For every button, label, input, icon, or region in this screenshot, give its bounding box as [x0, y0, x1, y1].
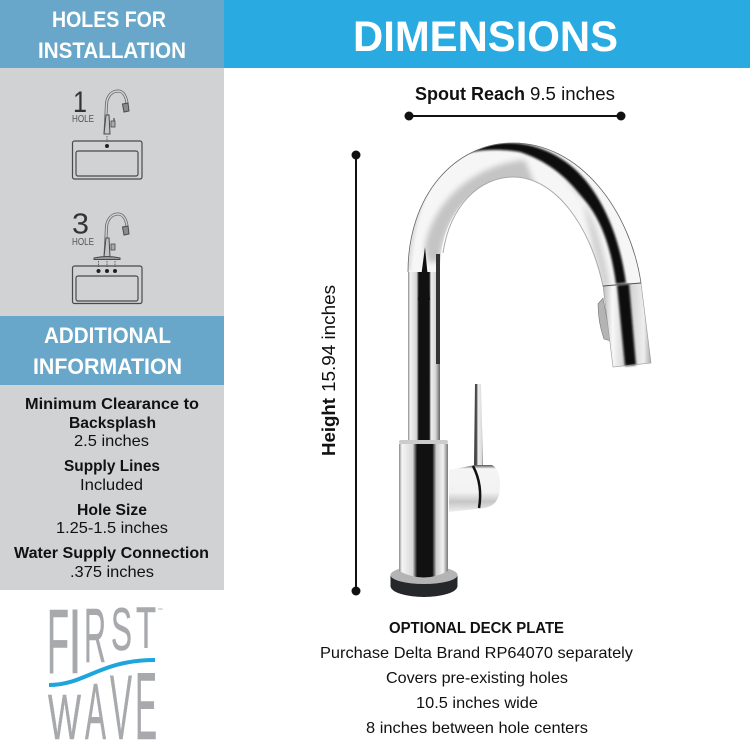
height dimension: 15.94 inches — [319, 285, 339, 392]
height dimension — [319, 150, 360, 596]
heading band: holes for installation: INSTALLATION — [38, 38, 186, 63]
logo: First Wave: T — [136, 596, 156, 661]
heading band: holes for installation — [0, 0, 224, 68]
panel: holes for installation — [0, 0, 224, 316]
icon: one hole installation: HOLE — [72, 114, 94, 125]
text: minimum clearance: 2.5 inches — [74, 433, 149, 450]
spout arc — [406, 140, 641, 364]
deck plate text: 10.5 inches wide — [416, 695, 538, 712]
icon: one hole installation: 1 — [73, 86, 87, 119]
heading band: dimensions: DIMENSIONS — [353, 13, 618, 61]
spout reach dimension: 9.5 inches — [530, 84, 615, 104]
icon: three hole installation: 3 — [72, 208, 89, 240]
text: supply lines: Supply Lines — [64, 458, 160, 475]
logo: First Wave: S — [111, 596, 132, 663]
text: minimum clearance: Backsplash — [69, 415, 156, 432]
spout reach dimension: Spout Reach — [415, 84, 525, 104]
logo: First Wave: F — [47, 591, 69, 693]
text: hole size: 1.25-1.5 inches — [56, 520, 168, 537]
text: minimum clearance: Minimum Clearance to — [25, 396, 199, 413]
logo: First Wave: SM — [158, 607, 163, 611]
icon: three hole installation: HOLE — [72, 237, 94, 248]
text: hole size: Hole Size — [77, 502, 147, 519]
deck plate text: 8 inches between hole centers — [366, 720, 588, 737]
text: minimum clearance — [25, 396, 199, 450]
text: supply lines: Included — [80, 477, 143, 494]
deck plate text: Covers pre-existing holes — [386, 670, 568, 687]
height dimension: Height — [319, 398, 339, 456]
text: hole size — [56, 502, 168, 537]
logo: First Wave: I — [68, 591, 82, 693]
deck plate text — [320, 620, 633, 737]
faucet stem — [408, 262, 440, 442]
faucet base — [390, 566, 458, 597]
faucet body — [399, 440, 448, 578]
logo: First Wave — [47, 591, 163, 750]
text: water supply connection: Water Supply Connection — [14, 545, 209, 562]
heading band: dimensions — [224, 0, 750, 68]
heading band: additional information — [0, 316, 224, 385]
heading band: additional information: ADDITIONAL — [44, 323, 171, 348]
logo: First Wave: R — [84, 593, 106, 679]
deck plate text: OPTIONAL DECK PLATE — [389, 620, 564, 637]
faucet — [390, 140, 651, 597]
spout reach dimension — [404, 84, 626, 120]
icon: three hole installation — [72, 208, 142, 304]
pull-down spray head — [598, 283, 651, 367]
deck plate text: Purchase Delta Brand RP64070 separately — [320, 645, 633, 662]
panel: additional information — [0, 316, 224, 590]
heading band: holes for installation: HOLES FOR — [52, 7, 166, 32]
text: supply lines — [64, 458, 160, 494]
heading band: additional information: INFORMATION — [33, 354, 182, 379]
icon: one hole installation — [72, 86, 142, 179]
text: water supply connection: .375 inches — [70, 564, 154, 581]
faucet handle — [449, 384, 500, 512]
text: water supply connection — [14, 545, 209, 581]
